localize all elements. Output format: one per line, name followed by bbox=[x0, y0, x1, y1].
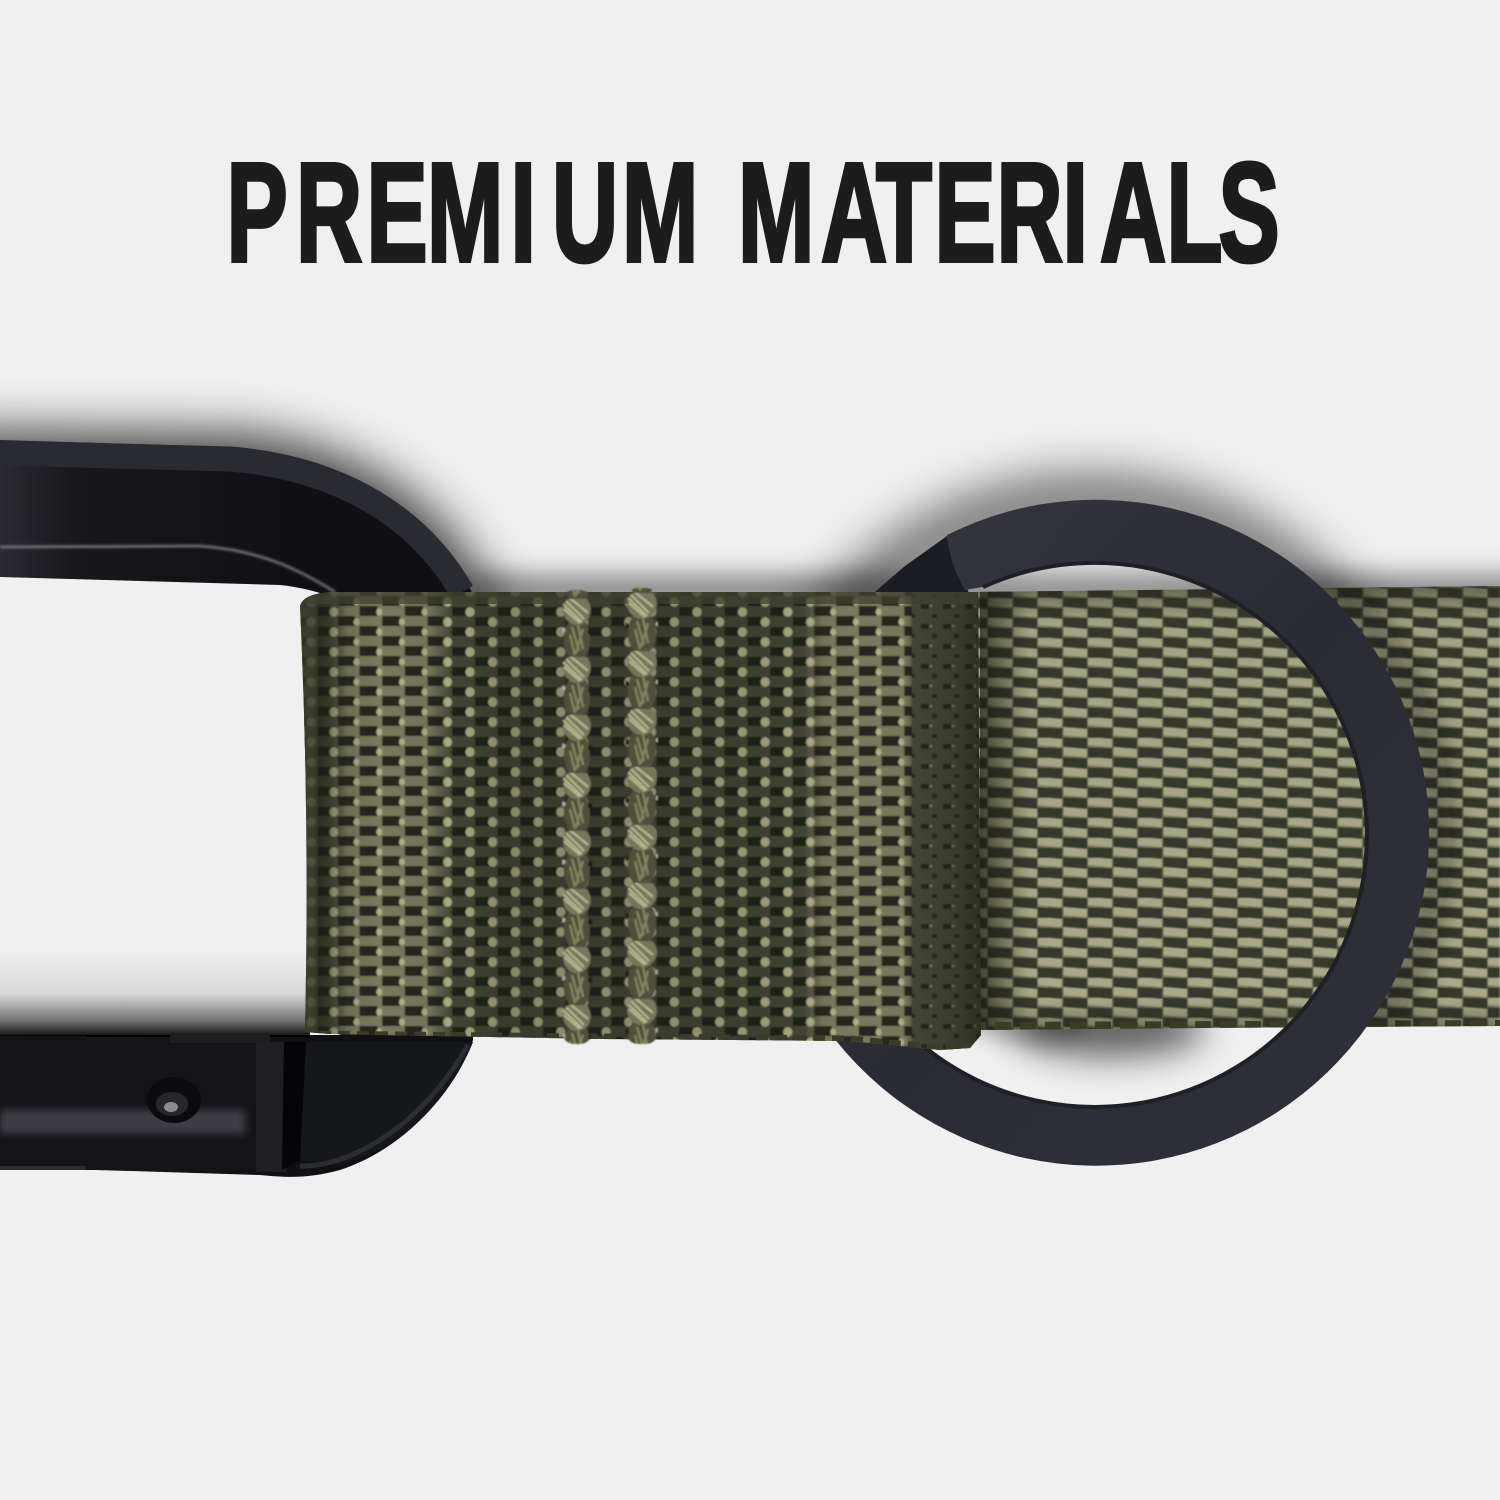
gate rivet bbox=[147, 1077, 201, 1123]
satin strand zones bbox=[336, 592, 912, 1046]
ring inner edge bbox=[870, 563, 1367, 1107]
steel ring bbox=[800, 500, 1429, 1166]
carabiner body bbox=[0, 440, 473, 1177]
ring shadow on strap bbox=[1322, 588, 1468, 1027]
carabiner gate bbox=[0, 1035, 306, 1172]
stitching bbox=[562, 588, 658, 1044]
title: PREMIUM MATERIALS bbox=[227, 134, 1280, 292]
ring rear arm bbox=[870, 536, 970, 596]
carabiner top rim bbox=[0, 453, 462, 592]
dotted weave bbox=[295, 585, 995, 1055]
carabiner edge highlight bbox=[0, 546, 335, 592]
tab fold bbox=[912, 585, 984, 1055]
stitch row one bbox=[562, 590, 592, 1044]
carabiner opening (clean background) bbox=[0, 570, 320, 1050]
carabiner body facet bbox=[295, 1042, 473, 1165]
top edge bbox=[300, 592, 978, 604]
carabiner bbox=[0, 440, 473, 1177]
webbing: outer strap bbox=[976, 586, 1500, 1030]
bottom edge bbox=[300, 1034, 985, 1048]
carabiner lower rim bbox=[300, 1045, 468, 1166]
hole shading bbox=[0, 950, 310, 1037]
product infographic canvas bbox=[0, 160, 1500, 1177]
stitch row two bbox=[626, 588, 658, 1044]
webbing: folded tab bbox=[295, 585, 995, 1055]
cast shadows behind hardware bbox=[0, 430, 1500, 1150]
